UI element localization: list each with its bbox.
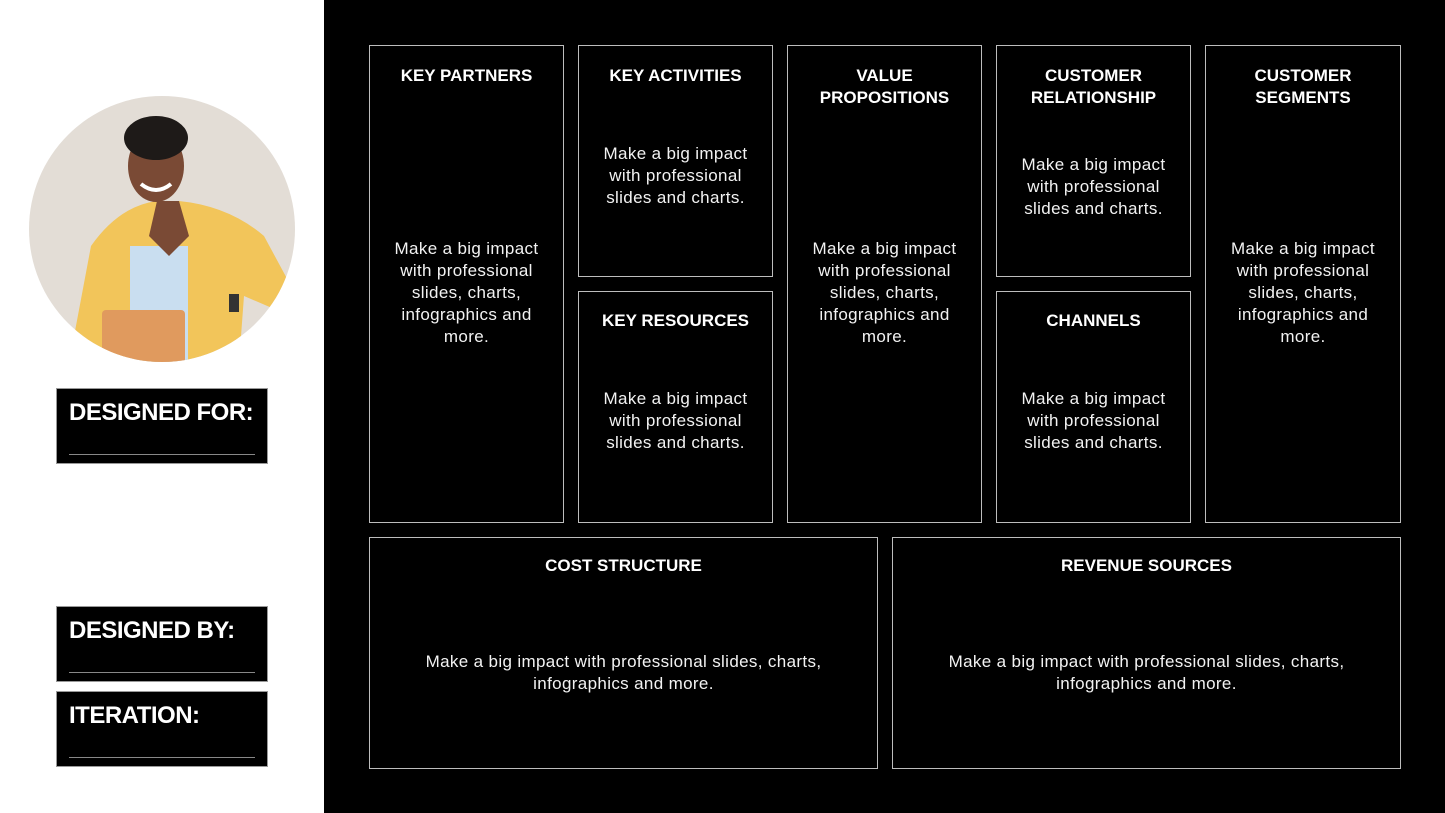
- label: designed by: [56, 606, 268, 682]
- panel: key partners: KEY PARTNERS: [401, 66, 532, 85]
- panel: key activities: slides and charts.: [606, 188, 745, 207]
- panel: revenue sources: infographics and more.: [1056, 674, 1237, 693]
- panel: customer segments: SEGMENTS: [1255, 88, 1351, 107]
- panel: customer relationship: [996, 45, 1191, 277]
- panel: channels: [996, 291, 1191, 523]
- panel: value propositions: slides, charts,: [830, 283, 939, 302]
- panel: channels: slides and charts.: [1024, 433, 1163, 452]
- panel: key activities: Make a big impact: [604, 144, 747, 163]
- panel: customer segments: with professional: [1237, 261, 1369, 280]
- panel: customer relationship: slides and charts.: [1024, 199, 1163, 218]
- panel: key partners: infographics and: [401, 305, 532, 324]
- panel: key resources: [578, 291, 773, 523]
- label: designed for: DESIGNED FOR:: [69, 399, 253, 426]
- panel: value propositions: more.: [862, 327, 907, 346]
- panel: value propositions: Make a big impact: [813, 239, 956, 258]
- panel: customer segments: more.: [1280, 327, 1326, 346]
- panel: value propositions: [787, 45, 982, 523]
- panel: customer segments: slides, charts,: [1248, 283, 1358, 302]
- panel: business model canvas: [324, 0, 1445, 813]
- panel: customer segments: [1205, 45, 1401, 523]
- panel: value propositions: VALUE: [856, 66, 913, 85]
- panel: value propositions: with professional: [818, 261, 951, 280]
- label: iteration: [56, 691, 268, 767]
- panel: channels: CHANNELS: [1046, 311, 1141, 330]
- panel: value propositions: infographics and: [819, 305, 950, 324]
- panel: revenue sources: [892, 537, 1401, 769]
- panel: key partners: more.: [444, 327, 489, 346]
- panel: key partners: slides, charts,: [412, 283, 521, 302]
- panel: channels: Make a big impact: [1022, 389, 1165, 408]
- panel: key resources: with professional: [609, 411, 742, 430]
- panel: key resources: slides and charts.: [606, 433, 745, 452]
- panel: cost structure: infographics and more.: [533, 674, 714, 693]
- panel: customer segments: infographics and: [1238, 305, 1368, 324]
- photo: woman with tablet: [29, 96, 295, 362]
- panel: key partners: with professional: [400, 261, 533, 280]
- panel: cost structure: COST STRUCTURE: [545, 556, 702, 575]
- panel: cost structure: [369, 537, 878, 769]
- panel: customer relationship: RELATIONSHIP: [1031, 88, 1156, 107]
- panel: revenue sources: Make a big impact with professional slides, charts,: [949, 652, 1344, 671]
- panel: customer relationship: Make a big impact: [1022, 155, 1165, 174]
- panel: revenue sources: REVENUE SOURCES: [1061, 556, 1232, 575]
- panel: customer segments: Make a big impact: [1231, 239, 1375, 258]
- panel: customer segments: CUSTOMER: [1254, 66, 1351, 85]
- label: designed for: [56, 388, 268, 464]
- panel: cost structure: Make a big impact with professional slides, charts,: [426, 652, 821, 671]
- panel: key partners: [369, 45, 564, 523]
- panel: value propositions: PROPOSITIONS: [820, 88, 949, 107]
- panel: customer relationship: with professional: [1027, 177, 1160, 196]
- panel: key activities: [578, 45, 773, 277]
- panel: key resources: KEY RESOURCES: [602, 311, 749, 330]
- panel: customer relationship: CUSTOMER: [1045, 66, 1142, 85]
- label: designed by: DESIGNED BY:: [69, 617, 235, 644]
- panel: key resources: Make a big impact: [604, 389, 747, 408]
- panel: channels: with professional: [1027, 411, 1160, 430]
- panel: key activities: KEY ACTIVITIES: [609, 66, 742, 85]
- panel: key partners: Make a big impact: [395, 239, 538, 258]
- label: iteration: ITERATION:: [69, 702, 200, 729]
- panel: key activities: with professional: [609, 166, 742, 185]
